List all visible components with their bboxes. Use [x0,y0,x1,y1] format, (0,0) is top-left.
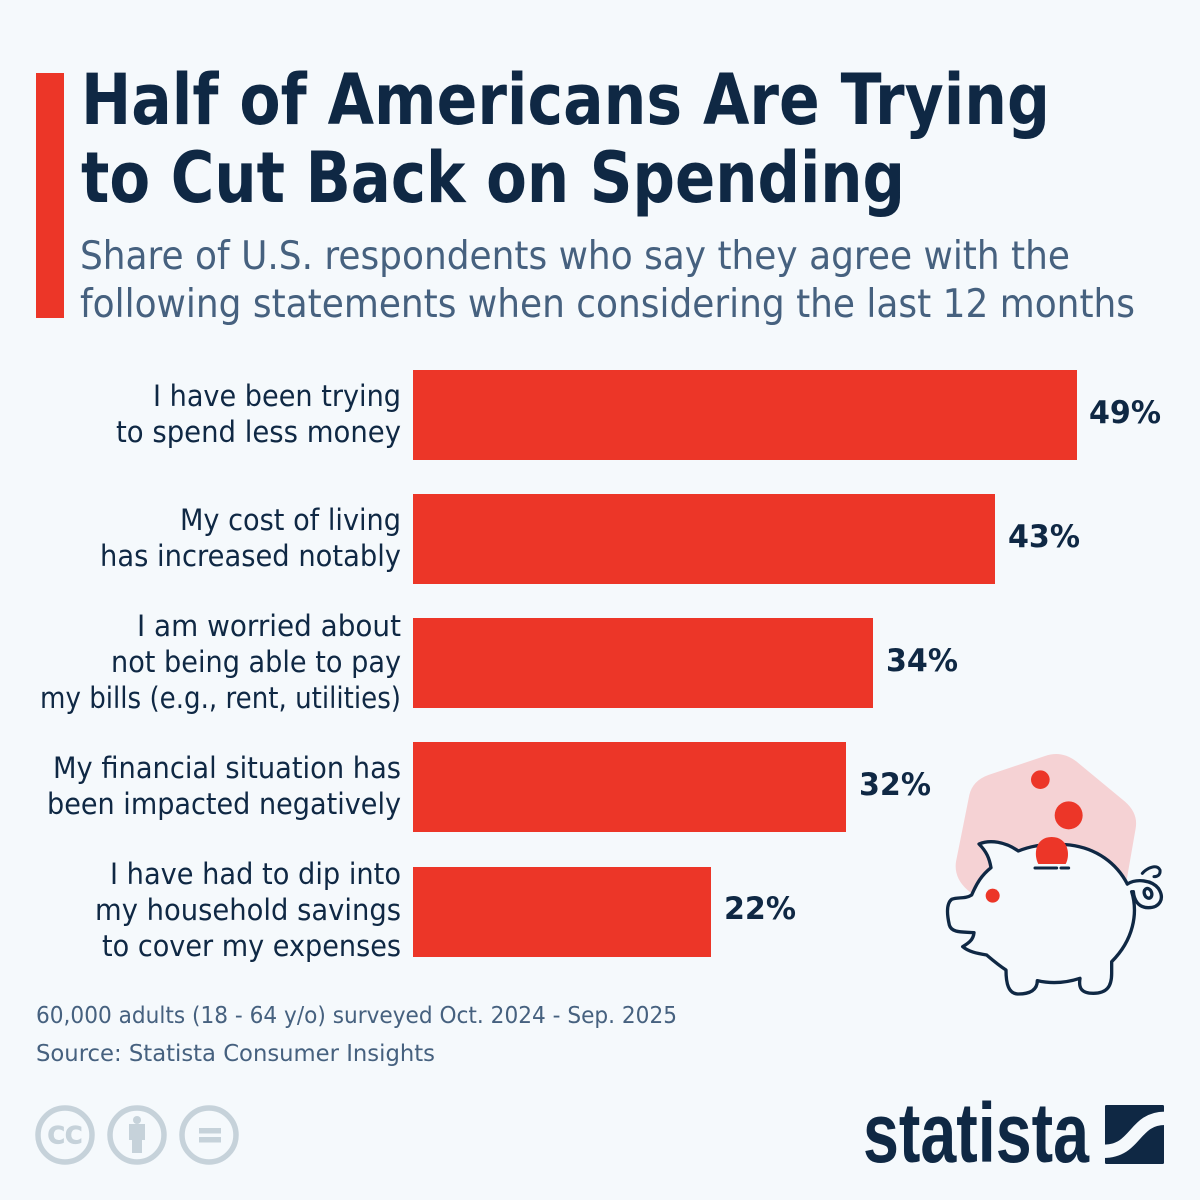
row: worried about bills: 34% [886,643,958,679]
title: Half of Americans Are Trying [81,59,1050,141]
bar chart [40,370,1161,963]
survey note: 60,000 adults (18 - 64 y/o) surveyed Oct. 2024 - Sep. 2025 [36,1003,677,1029]
row: worried about bills [40,609,958,715]
icon: creative commons licence: CC [48,1122,82,1150]
row: spend less money: to spend less money [116,415,401,449]
subtitle: Share of U.S. respondents who say they agree with the [80,234,1070,279]
row: cost of living [100,494,1080,584]
row: financial situation: been impacted negatively [47,787,401,821]
row: household savings: to cover my expenses [102,929,401,963]
row: cost of living: has increased notably [100,539,401,573]
row: household savings: 22% [724,891,796,927]
source: Source: Statista Consumer Insights [36,1041,435,1067]
row: household savings: my household savings [95,893,401,927]
row: household savings [95,857,796,963]
row: financial situation: 32% [859,767,931,803]
icon: piggy bank [948,754,1161,994]
row: household savings: I have had to dip into [110,857,401,891]
row: cost of living: My cost of living [180,503,401,537]
row: spend less money [116,370,1161,460]
logo: statista: statista [863,1086,1090,1180]
row: spend less money: I have been trying [153,379,401,413]
row: worried about bills: I am worried about [137,609,401,643]
icon: statista mark [1103,1105,1165,1164]
title [81,59,1050,219]
row: spend less money: 49% [1089,395,1161,431]
row: worried about bills: not being able to pay [111,645,401,679]
row: cost of living: 43% [1008,519,1080,555]
subtitle: following statements when considering the last 12 months [80,282,1135,327]
title: to Cut Back on Spending [81,137,905,219]
row: financial situation: My financial situation has [53,751,401,785]
row: worried about bills: my bills (e.g., rent, utilities) [40,681,401,715]
row: financial situation [47,742,931,832]
accent bar [36,73,64,318]
subtitle [80,234,1135,327]
icon: creative commons licence [38,1108,236,1162]
